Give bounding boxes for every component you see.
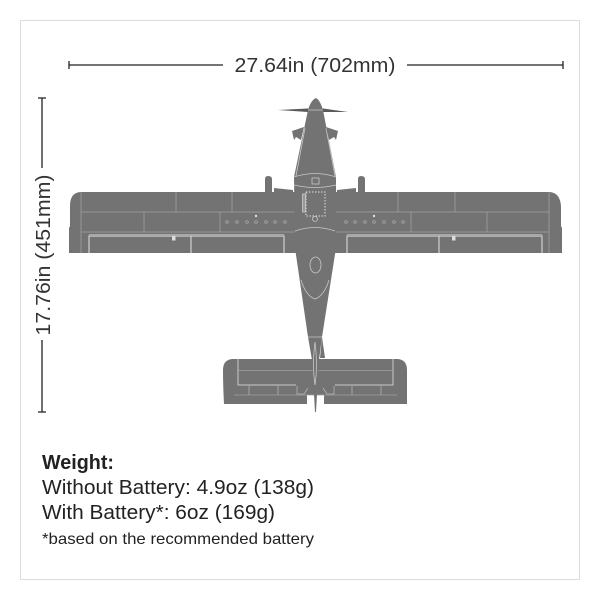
length dimension: 17.76in (451mm) bbox=[33, 174, 55, 336]
weight specs bbox=[42, 452, 314, 548]
wingspan dimension bbox=[69, 55, 563, 77]
wingspan dimension: 27.64in (702mm) bbox=[234, 55, 396, 77]
length dimension bbox=[33, 98, 55, 412]
without battery: Without Battery: 4.9oz (138g) bbox=[42, 477, 314, 499]
footnote: *based on the recommended battery bbox=[42, 531, 314, 548]
wing bbox=[69, 192, 562, 253]
with battery: With Battery*: 6oz (169g) bbox=[42, 502, 275, 524]
tail fin bbox=[320, 337, 325, 358]
fuselage details bbox=[294, 110, 336, 385]
weight heading: Weight: bbox=[42, 452, 114, 474]
propeller bbox=[278, 108, 348, 112]
cowl vents bbox=[292, 127, 338, 140]
wing struts bbox=[265, 176, 365, 192]
fuselage bbox=[294, 98, 336, 412]
airplane top view bbox=[69, 98, 562, 412]
tail bbox=[223, 359, 407, 404]
